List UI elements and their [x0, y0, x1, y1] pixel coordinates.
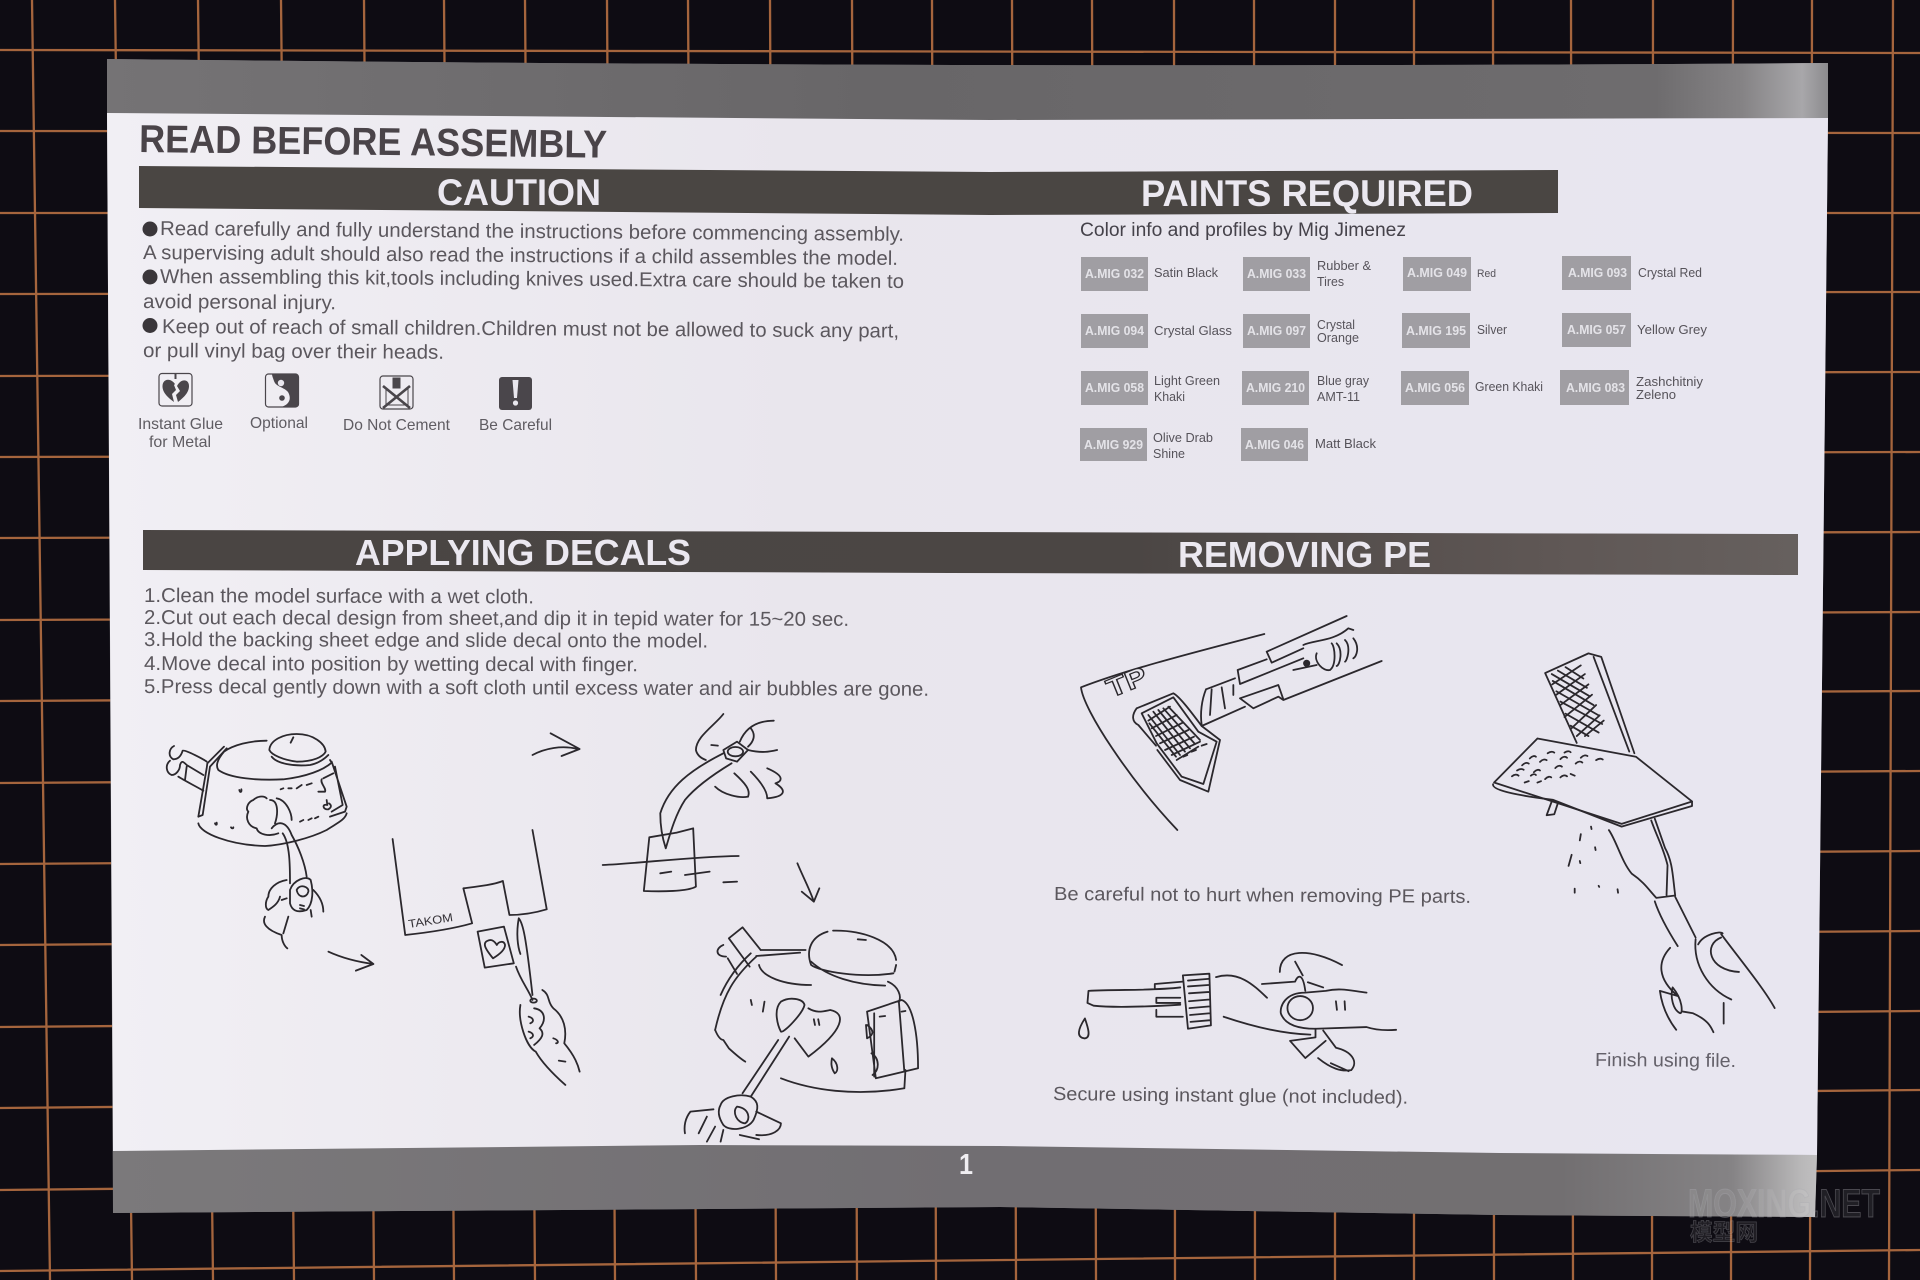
panel: paint swatches	[1080, 256, 1631, 461]
paint names: Blue gray	[1317, 373, 1369, 388]
paint names	[1153, 258, 1708, 461]
paint names: Crystal Red	[1638, 265, 1702, 280]
paint names: Zashchitniy	[1636, 374, 1704, 389]
text block: caution notes: avoid personal injury.	[143, 291, 336, 314]
illustration: cutting PE parts	[1081, 616, 1382, 830]
caption: careful removing PE: Be careful not to hurt when removing PE parts.	[1054, 884, 1471, 908]
watermark: 模型网	[1690, 1219, 1758, 1245]
paint names: Shine	[1153, 446, 1185, 461]
panel: paint swatches: A.MIG 195	[1406, 324, 1466, 338]
icon: do not cement	[380, 376, 413, 409]
text block: caution notes	[142, 218, 904, 364]
text block: decal steps: 5.Press decal gently down with a soft cloth until excess water and air bubbles are gone.	[144, 676, 929, 701]
paint names: Green Khaki	[1475, 379, 1543, 394]
paint names: Crystal	[1317, 317, 1355, 332]
panel: paint swatches: A.MIG 056	[1405, 381, 1465, 395]
paint names: Orange	[1317, 330, 1359, 345]
title: READ BEFORE ASSEMBLY	[139, 118, 607, 167]
panel: paint swatches: A.MIG 929	[1084, 438, 1143, 452]
label: frame mark: TP	[1102, 660, 1151, 704]
page number: 1	[959, 1149, 973, 1181]
paint names: AMT-11	[1317, 389, 1360, 404]
icon: instant glue for metal	[159, 374, 192, 406]
paint names: Matt Black	[1315, 436, 1376, 451]
icon: optional	[266, 374, 299, 407]
icon labels	[138, 415, 552, 451]
text block: caution notes: A supervising adult should also read the instructions if a child assembles the model.	[143, 242, 898, 270]
illustration: gluing with instant glue	[1079, 953, 1396, 1071]
illustration: dipping decal in water	[603, 714, 783, 891]
header bar: caution and paints	[139, 166, 1558, 215]
paint names: Yellow Grey	[1637, 322, 1708, 337]
paint names: Khaki	[1154, 389, 1185, 404]
panel: paint swatches: A.MIG 083	[1566, 381, 1625, 395]
heading: caution: CAUTION	[437, 172, 601, 213]
arrow: step two to three	[532, 733, 580, 756]
icon labels: Be Careful	[479, 417, 552, 434]
text block: caution notes: Read carefully and fully understand the instructions before commencing assembly.	[160, 218, 904, 246]
panel: paint swatches: A.MIG 058	[1085, 381, 1144, 395]
panel: paint swatches: A.MIG 210	[1246, 381, 1305, 395]
icon labels: for Metal	[149, 434, 211, 451]
header bar: decals and PE	[143, 530, 1798, 575]
caption: secure using glue: Secure using instant glue (not included).	[1053, 1084, 1408, 1109]
arrow: step three to four	[797, 863, 819, 902]
illustration: cutting decal from sheet	[393, 830, 580, 1085]
text block: decal steps: 2.Cut out each decal design from sheet,and dip it in tepid water for 15~20 sec.	[144, 607, 849, 631]
watermark	[1688, 1182, 1880, 1245]
icon: be careful	[499, 377, 532, 410]
panel: paint swatches: A.MIG 032	[1085, 267, 1144, 281]
icon labels: Optional	[250, 415, 308, 432]
illustration: finishing with file	[1493, 653, 1775, 1032]
panel: paint swatches: A.MIG 057	[1567, 323, 1626, 337]
panel: paint swatches: A.MIG 049	[1407, 266, 1467, 280]
icon labels: Instant Glue	[138, 416, 223, 433]
illustration: pressing decal on turret	[685, 927, 918, 1142]
paint names: Rubber &	[1317, 258, 1371, 273]
heading: paints required: PAINTS REQUIRED	[1141, 173, 1473, 214]
paint names: Crystal Glass	[1154, 323, 1232, 338]
paint names: Olive Drab	[1153, 430, 1213, 445]
arrow: step one to two	[328, 952, 373, 971]
text block: colour info: Color info and profiles by Mig Jimenez	[1080, 220, 1406, 241]
paint names: Zeleno	[1636, 387, 1676, 402]
text block: decal steps: 1.Clean the model surface with a wet cloth.	[144, 585, 534, 608]
panel: paint swatches: A.MIG 093	[1568, 266, 1627, 280]
paint names: Red	[1477, 268, 1496, 280]
paint names: Tires	[1317, 274, 1344, 289]
paint names: Light Green	[1154, 373, 1220, 388]
text block: decal steps: 4.Move decal into position by wetting decal with finger.	[144, 653, 638, 676]
text block: caution notes: Keep out of reach of small children.Children must not be allowed to suck any part,	[162, 316, 899, 343]
heading: removing PE: REMOVING PE	[1178, 534, 1431, 575]
heading: applying decals: APPLYING DECALS	[355, 532, 691, 573]
paint names: Satin Black	[1154, 265, 1218, 280]
panel: paint swatches: A.MIG 097	[1247, 324, 1306, 338]
text block: decal steps: 3.Hold the backing sheet edge and slide decal onto the model.	[144, 629, 708, 652]
paint names: Silver	[1477, 322, 1508, 337]
text block: decal steps	[144, 585, 929, 701]
label: sheet brand: TAKOM	[408, 912, 454, 931]
text block: caution notes: When assembling this kit,tools including knives used.Extra care should be taken to	[160, 266, 904, 293]
panel: paint swatches: A.MIG 033	[1247, 267, 1306, 281]
caption: finish using file: Finish using file.	[1595, 1050, 1736, 1072]
panel: paint swatches: A.MIG 094	[1085, 324, 1144, 338]
text block: caution notes: or pull vinyl bag over their heads.	[143, 340, 444, 364]
icon labels: Do Not Cement	[343, 417, 451, 434]
panel: paint swatches: A.MIG 046	[1245, 438, 1304, 452]
illustration: wiping turret with cloth	[167, 734, 347, 948]
